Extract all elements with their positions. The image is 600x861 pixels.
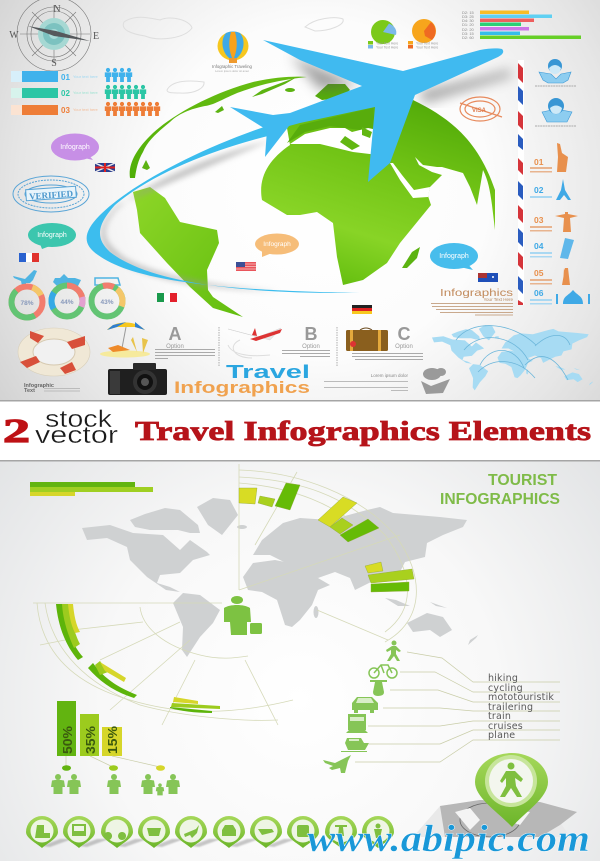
02 eiffel tower: 02: [534, 185, 544, 195]
icon: car: [352, 697, 378, 713]
contact text: Lorem ipsum dolor: [371, 373, 409, 378]
clouds: [123, 17, 343, 93]
horizontal bar chart: D3: 15: [462, 31, 475, 36]
option C: Option: [395, 344, 413, 350]
icon: train: [346, 714, 368, 733]
pin row: [26, 816, 394, 848]
logo stock vector: stock: [45, 406, 113, 433]
horizontal bar chart: D2: 60: [462, 35, 475, 40]
option A: A: [168, 324, 182, 344]
03 christ the redeemer: 03: [534, 215, 544, 225]
06 taj mahal: 06: [534, 288, 544, 298]
pie charts: Your Text Here: [416, 42, 438, 46]
horizontal bar chart: D3: 25: [462, 14, 475, 19]
radial bars west: [56, 604, 83, 660]
verified stamp: [13, 176, 89, 212]
horizontal bar chart: D2: 15: [462, 10, 475, 15]
small white-red plane: [228, 328, 282, 358]
horizontal bar chart: D1: 20: [462, 22, 475, 27]
compass rose: [9, 0, 99, 71]
pie charts: [368, 19, 438, 50]
camera: [108, 363, 167, 395]
compass rose: W: [9, 30, 19, 41]
transport labels: [488, 673, 554, 741]
hot air balloon: Infographic Traveling: [212, 64, 253, 69]
visa stamp: VISA: [472, 108, 487, 114]
radial bars east: [365, 562, 414, 592]
icon: ship: [341, 738, 369, 752]
banner title: Travel Infographics Elements: [135, 416, 591, 446]
03 christ the redeemer: [530, 212, 578, 232]
visa stamp: [460, 97, 502, 121]
logo digit 2: 2: [3, 413, 30, 450]
verified stamp: VERIFIED: [29, 188, 74, 202]
dashed divider two: [336, 327, 338, 366]
transport labels: hiking: [488, 673, 518, 684]
pie charts: Your Text Here: [376, 46, 398, 50]
donut charts: 78%: [20, 300, 34, 307]
transport labels: trailering: [488, 702, 533, 713]
Italy flag: [157, 293, 177, 302]
speech bubble orange: Infograph: [263, 241, 291, 248]
top left bars: [30, 482, 153, 496]
blue world map with routes: [432, 325, 593, 390]
speech bubble blue: [430, 243, 478, 270]
big location pin: [475, 753, 548, 827]
beach umbrella: [100, 322, 150, 358]
compass rose: S: [51, 58, 57, 69]
04 leaning tower: [530, 238, 574, 259]
flight path swoosh: [87, 125, 360, 293]
Infographics text block: [431, 287, 513, 316]
life ring: Infographic: [24, 383, 54, 389]
transport labels: cruises: [488, 721, 523, 732]
04 leaning tower: 04: [534, 241, 544, 251]
globe top-left crescent: [130, 77, 307, 178]
watermark: www.abipic.com: [307, 818, 590, 860]
option B: [282, 324, 330, 357]
logo stock vector: [35, 406, 118, 449]
list rows 01 02 03: [11, 71, 99, 115]
pie charts: Your Text Here: [416, 46, 438, 50]
speech bubble orange: [255, 234, 299, 257]
UK flag: [95, 163, 115, 172]
list rows 01 02 03: Your text here: [73, 107, 99, 112]
05 monument: 05: [534, 268, 544, 278]
icon: walker: [386, 640, 401, 661]
percentage bars: 15%: [105, 726, 120, 754]
airplane: [230, 40, 503, 182]
horizontal bar chart: [462, 10, 581, 40]
option A: [155, 324, 215, 359]
Africa, Arabia and Asia: [261, 100, 495, 285]
Australia flag: [478, 273, 498, 282]
Travel Infographics title: Infographics: [174, 379, 310, 397]
transport labels: train: [488, 711, 511, 722]
Infographics text block: Your Text Here: [483, 297, 513, 302]
people rows: [105, 68, 160, 116]
06 taj mahal: [530, 288, 590, 304]
05 monument: [530, 268, 570, 285]
title: [440, 472, 560, 508]
option A: Option: [166, 344, 184, 350]
option C: C: [398, 324, 410, 344]
option B: B: [304, 324, 318, 344]
option B: Option: [302, 344, 320, 350]
transport labels: cycling: [488, 683, 523, 694]
world map grey: [82, 498, 478, 657]
life ring: [18, 328, 90, 394]
percentage bars: 50%: [60, 726, 75, 754]
tourist with suitcase: [224, 596, 262, 635]
radial guide lines: [33, 464, 416, 725]
dashed divider one: [218, 327, 220, 366]
avatar male: [535, 59, 576, 86]
transport labels: mototouristik: [488, 692, 554, 703]
landmarks list: [530, 143, 590, 304]
connector lines: [355, 652, 560, 762]
horizontal bar chart: D4: 30: [462, 18, 475, 23]
avatar female: [535, 98, 576, 126]
title: TOURIST: [488, 472, 557, 489]
percent connectors: [66, 756, 160, 767]
list rows 01 02 03: 02: [61, 89, 70, 98]
globe: [130, 77, 495, 317]
Travel Infographics title: Travel: [226, 362, 310, 382]
radial bars south: [170, 697, 220, 713]
option C: [352, 324, 423, 360]
01 statue of liberty: [530, 143, 568, 172]
South America: [133, 187, 243, 317]
horizontal bar chart: D2: 20: [462, 27, 475, 32]
life ring: Text: [24, 388, 35, 394]
Infographics text block: Infographics: [440, 287, 513, 299]
percentage bars: 35%: [83, 726, 98, 754]
pin shadow strip: [42, 839, 296, 847]
radial bars south west: [88, 661, 137, 698]
compass rose: E: [93, 31, 99, 42]
pie charts: Your Text Here: [376, 42, 398, 46]
speech bubble teal: Infograph: [37, 232, 67, 239]
donut charts: 44%: [60, 299, 74, 306]
Travel Infographics title: [174, 362, 310, 397]
Madagascar: [402, 247, 420, 268]
transport icons: [13, 270, 120, 286]
transport labels: plane: [488, 730, 515, 741]
logo stock vector: vector: [35, 422, 118, 449]
radial bars north east: [318, 497, 379, 542]
percentage bars: [57, 701, 122, 756]
Red Sea: [390, 163, 430, 198]
airmail stripe: [518, 60, 524, 305]
pin icons: [35, 824, 382, 840]
list rows 01 02 03: 03: [61, 106, 70, 115]
speech bubble purple: Infograph: [60, 144, 90, 151]
Europe fragment: [315, 84, 350, 100]
icon: bicycle: [369, 665, 397, 678]
contact text: [324, 373, 409, 391]
icon: plane: [323, 755, 351, 773]
list rows 01 02 03: Your text here: [73, 90, 99, 95]
pins: [26, 816, 394, 848]
list rows 01 02 03: 01: [61, 73, 70, 82]
01 statue of liberty: 01: [534, 157, 544, 167]
radial bars north: [239, 483, 300, 510]
plane shadow: [290, 55, 512, 103]
speech bubble purple: [51, 134, 99, 160]
panel: top travel infographic: [0, 0, 600, 401]
list rows 01 02 03: Your text here: [73, 74, 99, 79]
suitcase: [346, 328, 388, 351]
icon: scooter: [370, 680, 387, 696]
speech bubble blue: Infograph: [439, 253, 469, 260]
banner: [0, 400, 600, 462]
donut charts: [6, 279, 129, 323]
Germany flag: [352, 305, 372, 314]
France flag: [19, 253, 39, 262]
audience groups: [51, 765, 180, 795]
hot air balloon: [212, 32, 253, 73]
Europe mass under wing: [287, 108, 378, 150]
donut charts: 43%: [100, 299, 114, 306]
02 eiffel tower: [530, 179, 571, 200]
USA flag: [236, 262, 256, 271]
contact icon: [421, 368, 450, 394]
map sheet under big pin: [413, 800, 577, 837]
hot air balloon: Lorem ipsum dolor sit amet: [215, 69, 249, 73]
panel: tourist infographics: [0, 462, 600, 861]
compass rose: N: [53, 4, 61, 15]
speech bubble teal: [28, 223, 76, 249]
Mediterranean: [290, 128, 378, 155]
title: INFOGRAPHICS: [440, 491, 560, 508]
